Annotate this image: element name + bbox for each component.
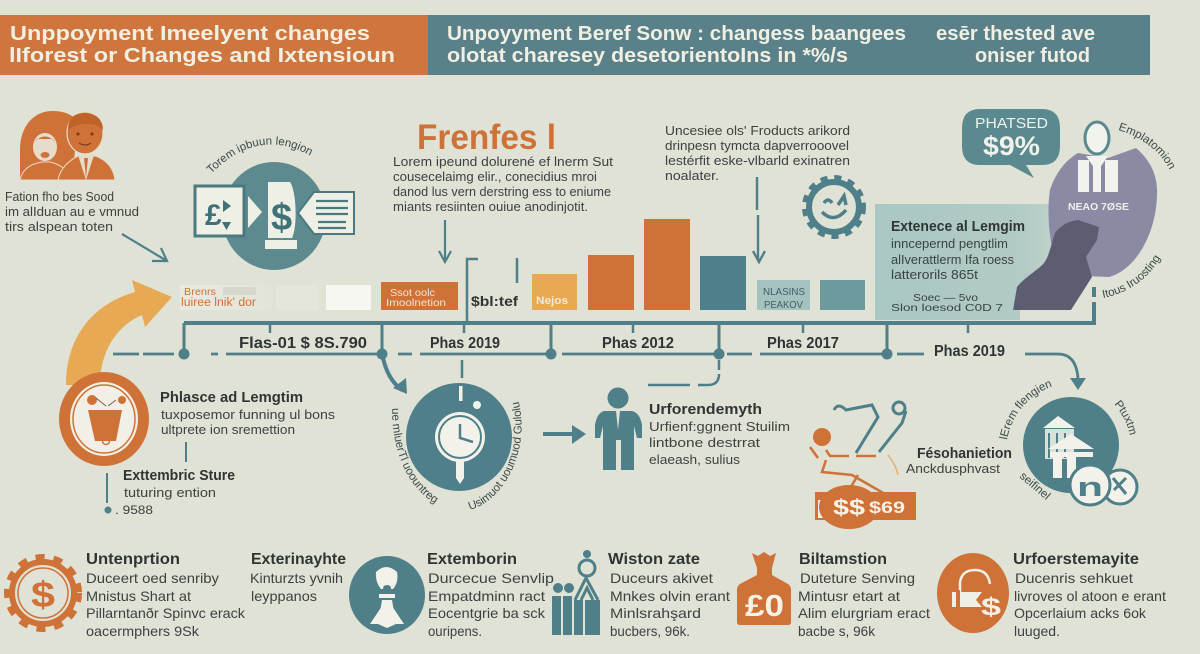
timeline labels: Phas 2019 (934, 343, 1005, 360)
text block: exterinayhte: leyppanos (251, 588, 317, 604)
text block: exterinayhte (250, 551, 346, 604)
text block: extemborin (427, 551, 554, 639)
text block: urfoerstemayite: Urfoerstemayite (1013, 551, 1139, 568)
text block: biltamstion: Mintusr etart at (798, 588, 900, 604)
text block: untenprtion: Untenprtion (86, 551, 180, 568)
text block: untenprtion: Pillarntanðr Spinvc erack (86, 605, 246, 621)
text block: urfoerstemayite: livroves ol atoon e erant (1014, 588, 1166, 604)
text block: upper right paragraph: noalater. (665, 168, 719, 183)
bar chart: timeline bars: PEAKOV (764, 299, 803, 311)
timeline: axis, ticks, nodes (113, 258, 1094, 390)
header banner: right teal: Unpoyyment Beref Sonw : changess baangees (447, 23, 906, 45)
text block: upper right paragraph: Uncesiee ols' Froducts arikord (665, 123, 850, 138)
header banner: left orange: Unppoyment Imeelyent changes (10, 23, 370, 45)
text block: lorem paragraph: danod lus vern derstring ess to eniume (393, 184, 611, 199)
text block: fesohanietion (906, 445, 1012, 476)
text block: exterinayhte: Kinturzts yvnih (250, 570, 343, 586)
curved label: clock left: ue mluerTl uoountreg (392, 408, 438, 504)
panel: extended length: Extenece al Lemgim (891, 219, 1025, 235)
curved label: bank lower: seifinel (1020, 473, 1051, 500)
text block: urfoerstemayite (1013, 551, 1166, 639)
icon: cyclist with price tag (810, 402, 916, 529)
icon: bank circle with coins (1023, 397, 1137, 505)
bar chart: timeline bars: NLASINS (763, 286, 805, 298)
text block: biltamstion (798, 551, 930, 639)
arrow: upper right paragraph to bars (753, 177, 765, 262)
timeline labels: Phas 2019 (430, 335, 500, 352)
icon: gear with face (805, 178, 863, 236)
text block: lorem paragraph (393, 154, 613, 214)
text block: extemborin: Durcecue Senvlip (428, 570, 554, 586)
text block: extemborin: Empatdminn ract (428, 588, 545, 604)
bar chart: timeline bars (180, 219, 865, 311)
arrow: clock to person (543, 425, 586, 444)
icon: person in purple blob: NEAO 7ØSE (1068, 201, 1129, 213)
text block: lorem paragraph: Lorem ipeund dolurené ef lnerm Sut (393, 154, 613, 169)
text block: urfoerstemayite: luuged. (1014, 623, 1060, 639)
text block: wiston zate (608, 551, 730, 639)
curved label: exchange circle: Torem ipbuun lengion (206, 136, 312, 172)
curved label: bank right: Ptuxtm (1114, 400, 1136, 435)
text block: unforeseen: lintbone destrrat (649, 435, 760, 450)
icon: orange lock dollar (937, 553, 1009, 633)
icon: money bag pounds: £0 (745, 588, 784, 623)
curved label: bank upper: lErem flengien (999, 381, 1052, 440)
icon: money bag pounds (737, 552, 791, 625)
speech bubble: phased percent: $9% (983, 131, 1040, 161)
icon: currency exchange circle: £ (205, 199, 222, 232)
heading: Frenfes: Frenfes l (417, 118, 556, 157)
text block: upper right paragraph: drinpesn tymcta dapverrooovel (665, 138, 849, 153)
timeline labels: Phas 2012 (602, 335, 674, 352)
text block: wiston zate: bucbers, 96k. (610, 623, 690, 639)
text block: lorem paragraph: cousecelaimg elir., conecidius mroi (393, 169, 597, 184)
text block: extemborin: ouripens. (428, 623, 482, 639)
header banner: right teal: olotat charesey desetorientoIns in *%/s (447, 45, 848, 67)
timeline labels: Flas-01 $ 8S.790 (239, 335, 367, 352)
curved label: employment: Emplatomion (1119, 122, 1174, 170)
arrow: paragraph to bars (439, 220, 451, 262)
icon: orange gear with dollar (7, 557, 79, 629)
curved label: lower blob: Itous Iruosting (1102, 255, 1162, 298)
panel: extended length: inncepernd pengtlim (891, 236, 1008, 251)
panel: extended length: Soec — 5vo (913, 293, 979, 304)
text block: biltamstion: Duteture Senving (800, 570, 915, 586)
icon: orange lock dollar: $ (981, 593, 1001, 621)
text block: upper right paragraph (665, 123, 850, 183)
panel: extended length: Slon loesod C0D 7 (891, 303, 1004, 314)
text block: top left note: Fation fho bes Sood (5, 189, 114, 204)
text block: phase length: Exttembric Sture (123, 467, 235, 484)
header banner: right teal (428, 15, 1150, 75)
header banner: left orange: lIforest or Changes and Ixtensioun (9, 45, 395, 67)
icon: orange basket badge (59, 372, 149, 466)
text block: exterinayhte: Exterinayhte (251, 551, 346, 568)
icon: teal group with bars (552, 550, 600, 635)
text block: top left note (5, 189, 139, 234)
header banner: left orange (0, 15, 428, 75)
text block: extemborin: Extemborin (427, 551, 517, 568)
bar chart: timeline bars: luiree lnik' dor (181, 297, 256, 309)
icon: orange gear with dollar: $ (31, 574, 55, 615)
text block: fesohanietion: Fésohanietion (917, 445, 1012, 462)
text block: biltamstion: bacbe s, 96k (798, 623, 876, 639)
text block: untenprtion: oacermphers 9Sk (86, 623, 200, 639)
text block: unforeseen: Urforendemyth (649, 401, 762, 418)
text block: unforeseen (649, 401, 790, 467)
text block: extemborin: Eocentgrie ba sck (428, 605, 546, 621)
arrow: node to clock (383, 358, 407, 394)
bar chart: timeline bars: Brenrs (184, 286, 216, 298)
text block: unforeseen: Urfienf:ggnent Stuilim (649, 419, 790, 434)
icon: currency exchange circle (195, 162, 354, 270)
text block: wiston zate: Minlsrahşard (610, 605, 701, 621)
timeline labels: Phas 2017 (767, 335, 839, 352)
text block: top left note: im alIduan au e vmnud (5, 204, 139, 219)
text block: upper right paragraph: lestérfit eske-vlbarld exinatren (665, 153, 850, 168)
panel: extended length (875, 204, 1075, 320)
icon: clock circle (406, 360, 512, 491)
header banner: right teal: oniser futod (975, 45, 1090, 67)
text block: untenprtion: Mnistus Shart at (86, 588, 191, 604)
text block: untenprtion: Duceert oed senriby (86, 570, 219, 586)
bar chart: timeline bars: Imoolnetion (386, 297, 446, 309)
speech bubble: phased percent: PHATSED (975, 115, 1048, 132)
text block: wiston zate: Wiston zate (608, 551, 700, 568)
text block: biltamstion: Alim elurgriam eract (798, 605, 930, 621)
text block: top left note: tirs alspean toten (5, 219, 113, 234)
text block: urfoerstemayite: Ducenris sehkuet (1015, 570, 1133, 586)
curved label: clock right: Usimuot uoumuod Guloluno (468, 402, 522, 509)
bar chart: timeline bars: $bl:tef (471, 293, 518, 309)
text block: wiston zate: Duceurs akivet (610, 570, 713, 586)
text block: untenprtion (86, 551, 246, 639)
text block: phase length: tuturing ention (124, 485, 216, 500)
speech bubble: phased percent (962, 109, 1060, 178)
arrow: orange curved (66, 280, 172, 385)
icon: business person (595, 388, 642, 470)
arrow: note to timeline (122, 234, 167, 261)
bar chart: timeline bars: Ssot oolc (390, 287, 435, 299)
panel: extended length: alIverattlerm Ifa roess (891, 252, 1014, 267)
icon: bank circle with coins: n (1077, 472, 1103, 502)
text block: lorem paragraph: miants resiinten ouiue anodinjotit. (393, 199, 588, 214)
timeline labels (239, 335, 1005, 360)
text block: urfoerstemayite: Opcerlaium acks 6ok (1014, 605, 1147, 621)
text block: fesohanietion: Anckdusphvast (906, 461, 1000, 476)
text block: phase length: . 9588 (115, 505, 153, 517)
text block: phase length: ultprete ion sremettion (161, 422, 295, 437)
icon: couple of people (20, 111, 115, 180)
text block: wiston zate: Mnkes olvin erant (610, 588, 730, 604)
icon: teal circle figure (349, 556, 425, 634)
icon: cyclist with price tag: $$ (833, 495, 865, 520)
icon: currency exchange circle: $ (271, 197, 292, 239)
text block: phase length: Phlasce ad Lemgtim (160, 389, 303, 406)
text block: phase length (104, 389, 336, 517)
icon: cyclist with price tag: $69 (869, 498, 905, 517)
text block: phase length: tuxposemor funning ul bons (161, 407, 336, 422)
icon: person in purple blob (1013, 122, 1157, 310)
header banner: right teal: esēr thested ave (936, 23, 1095, 45)
text block: unforeseen: elaeash, sulius (649, 452, 741, 467)
text block: biltamstion: Biltamstion (799, 551, 887, 568)
bar chart: timeline bars: Nejos (536, 295, 568, 307)
panel: extended length: latterorils 865t (891, 267, 978, 282)
